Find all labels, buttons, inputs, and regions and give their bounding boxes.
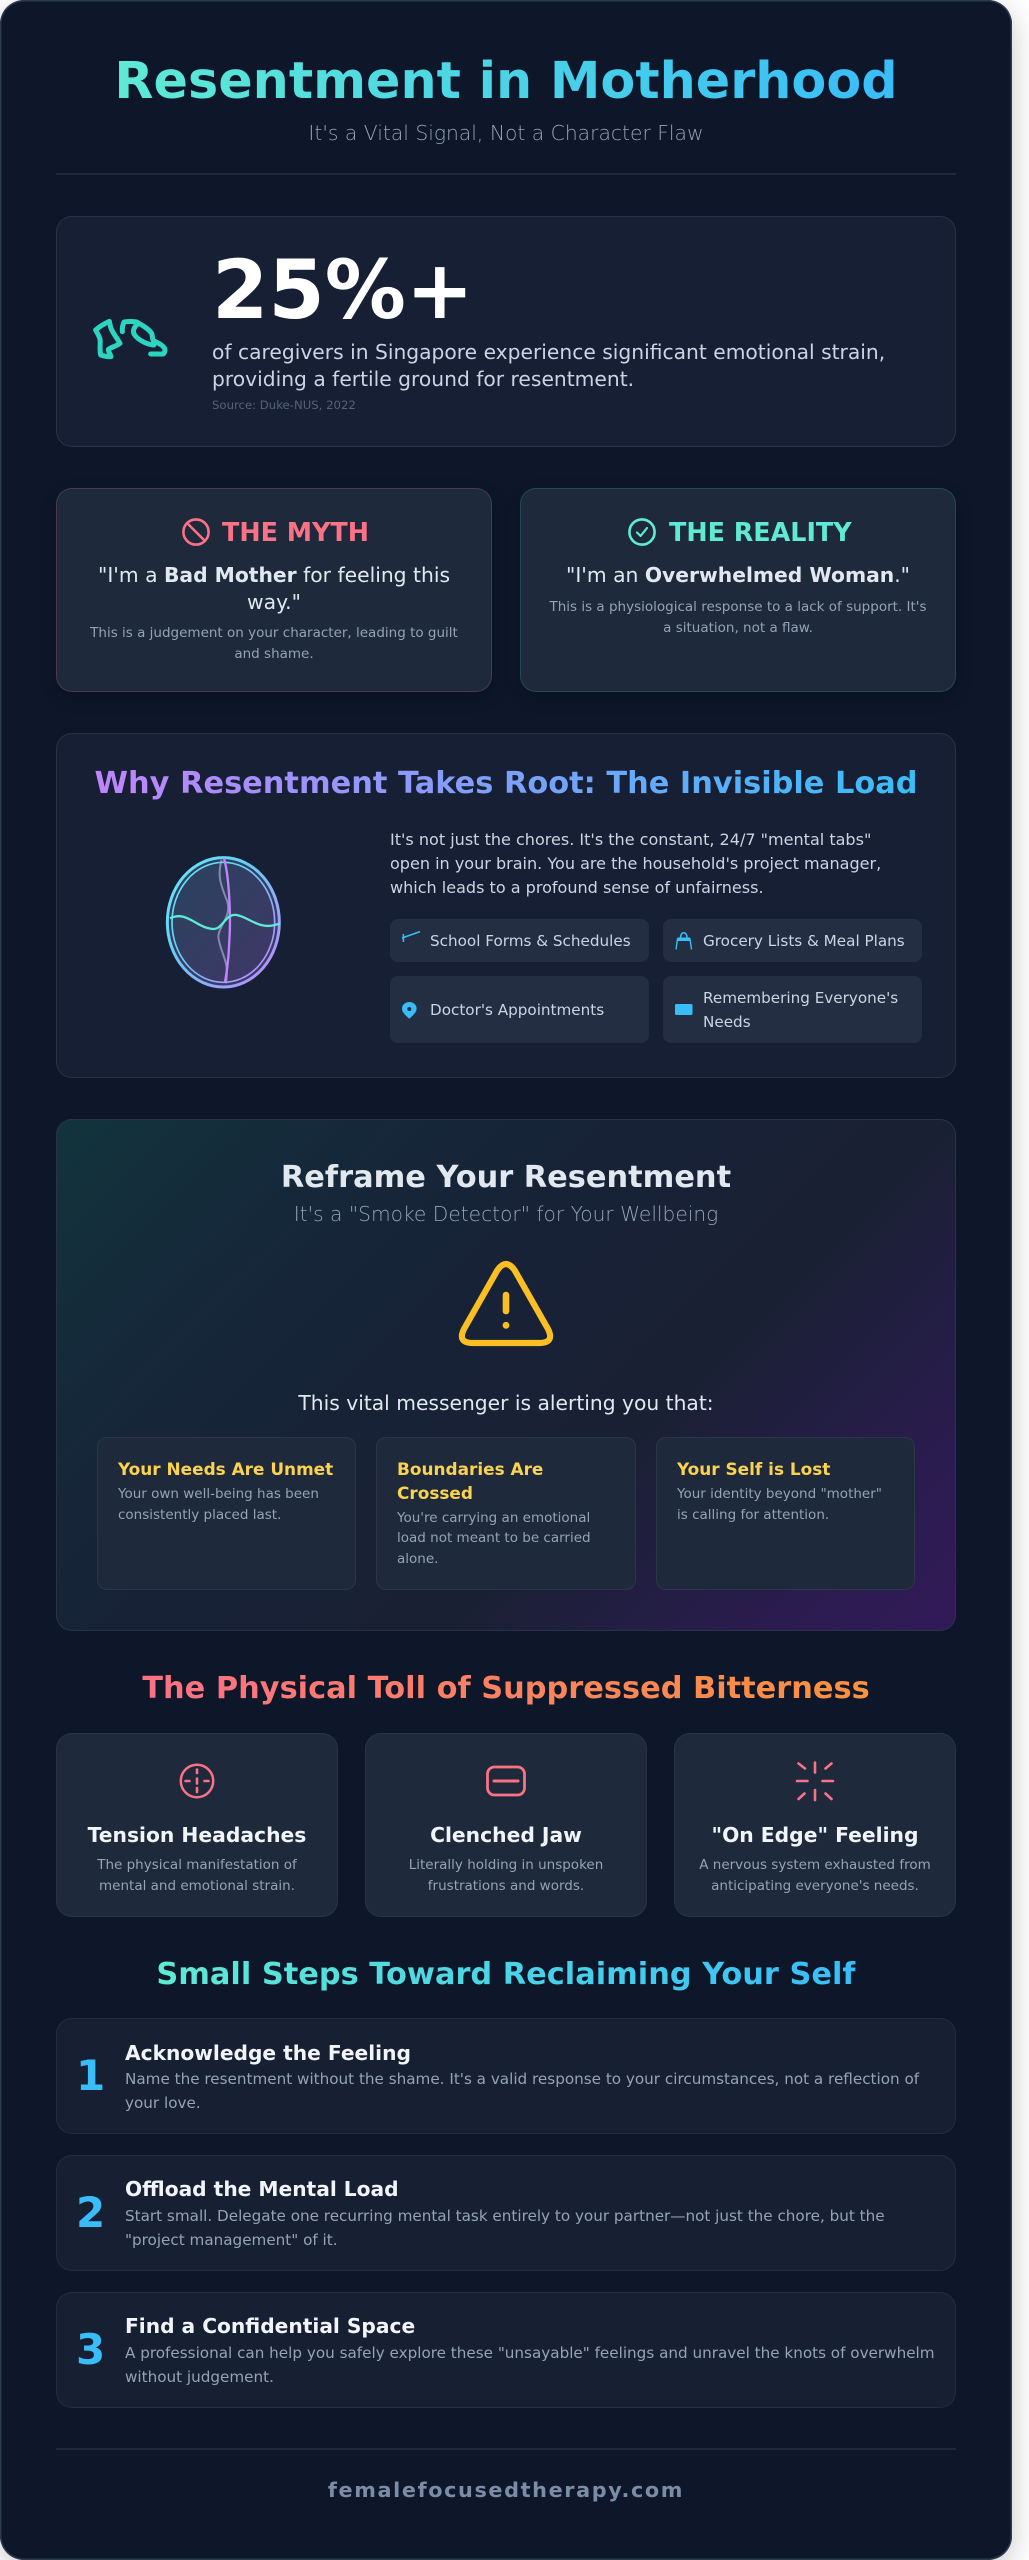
card text: load not meant to be carried [397,1530,591,1546]
card text [397,1510,591,1567]
step text [125,2206,885,2249]
myth quote: "I'm a Bad Mother for feeling this [98,563,450,587]
symptom text [699,1857,931,1894]
step number: 1 [76,2051,105,2100]
statistic description [212,340,885,390]
card heading: Your Needs Are Unmet [118,1459,333,1479]
step number: 3 [76,2325,105,2374]
card text: Your identity beyond "mother" [677,1486,882,1502]
panel: clenched jaw [365,1733,647,1917]
source: Source: Duke-NUS, 2022 [212,398,356,412]
panel: the reality [520,488,956,692]
step number: 2 [76,2188,105,2237]
icon: rectangle [675,1004,692,1015]
task label: Grocery Lists & Meal Plans [703,932,905,950]
card text: You're carrying an emotional [397,1510,590,1526]
step text: Start small. Delegate one recurring mental task entirely to your partner—not just the chore, but the [125,2206,885,2224]
card: needs unmet [97,1437,356,1590]
statistic description: providing a fertile ground for resentment. [212,366,634,390]
task label [703,989,898,1031]
card text [118,1486,319,1523]
step text: your love. [125,2094,201,2112]
card text: alone. [397,1551,438,1567]
reality heading: THE REALITY [669,517,852,547]
icon: shopping bag [675,932,692,950]
task label: Remembering Everyone's [703,989,898,1007]
panel: on edge [674,1733,956,1917]
panel: step 2 [56,2155,956,2271]
step text: without judgement. [125,2368,274,2386]
messenger line: This vital messenger is alerting you that: [298,1390,714,1414]
symptom text: The physical manifestation of [97,1857,297,1873]
card heading: Crossed [397,1483,473,1503]
panel: step 1 [56,2018,956,2134]
step title: Offload the Mental Load [125,2177,399,2201]
title: Resentment in Motherhood [114,51,898,110]
icon: jaw [486,1766,526,1796]
card: boundaries crossed [376,1437,636,1590]
invisible load heading: Why Resentment Takes Root: The Invisible Load [95,766,917,801]
card heading: Boundaries Are [397,1459,543,1479]
icon: map pin [402,1002,417,1019]
invisible load paragraph: open in your brain. You are the household's project manager, [390,854,881,872]
step text: "project management" of it. [125,2231,338,2249]
reality explanation: This is a physiological response to a lack of support. It's [549,599,927,615]
reframe heading: Reframe Your Resentment [281,1160,731,1195]
icon: hands [93,318,168,360]
icon: brain [166,856,281,988]
symptom text: Literally holding in unspoken [409,1857,603,1873]
symptom text: A nervous system exhausted from [699,1857,931,1873]
step text [125,2070,920,2112]
reality quote: "I'm an Overwhelmed Woman." [566,563,910,587]
symptom title: Tension Headaches [88,1823,306,1847]
icon: head target [180,1764,214,1798]
statistic description: of caregivers in Singapore experience significant emotional strain, [212,340,885,364]
card heading [397,1459,543,1503]
symptom text [97,1857,297,1894]
card: self lost [656,1437,915,1590]
reality explanation [549,599,927,636]
card text: consistently placed last. [118,1507,281,1523]
card heading: Your Self is Lost [677,1459,830,1479]
icon: nerves burst [796,1761,834,1802]
symptom title: Clenched Jaw [430,1823,582,1847]
reality explanation: a situation, not a flaw. [663,620,813,636]
big number: 25%+ [212,244,474,338]
invisible load paragraph [390,830,881,896]
subtitle: It's a Vital Signal, Not a Character Flaw [308,121,704,145]
physical toll heading: The Physical Toll of Suppressed Bitterness [142,1671,870,1706]
myth quote [98,563,450,614]
icon: warning triangle [458,1260,554,1346]
symptom text: mental and emotional strain. [99,1878,295,1894]
task label: School Forms & Schedules [430,932,631,950]
step text: Name the resentment without the shame. It's a valid response to your circumstances, not a reflection of [125,2070,919,2088]
myth explanation [90,625,458,662]
panel: reframe [56,1119,956,1631]
task: school forms [390,919,649,962]
panel: invisible load [56,733,956,1078]
symptom text [409,1857,603,1894]
step text [125,2344,935,2386]
small steps heading: Small Steps Toward Reclaiming Your Self [156,1957,856,1992]
panel: the myth [56,488,492,692]
card text [677,1486,882,1523]
myth explanation: and shame. [234,646,314,662]
icon: school form [402,930,420,942]
task label: Needs [703,1013,751,1031]
icon: check circle [628,518,656,546]
myth quote: way." [247,590,301,614]
invisible load paragraph: which leads to a profound sense of unfairness. [390,878,764,896]
step title: Acknowledge the Feeling [125,2040,411,2064]
invisible load paragraph: It's not just the chores. It's the constant, 24/7 "mental tabs" [390,830,871,848]
step title: Find a Confidential Space [125,2314,415,2338]
card text: Your own well-being has been [118,1486,319,1502]
panel: tension headaches [56,1733,338,1917]
symptom text: anticipating everyone's needs. [711,1878,919,1894]
panel: step 3 [56,2292,956,2408]
task label: Doctor's Appointments [430,1001,604,1019]
icon: prohibited [182,518,210,546]
task: grocery lists [663,919,922,962]
myth heading: THE MYTH [222,517,369,547]
symptom title: "On Edge" Feeling [712,1823,918,1847]
card text: is calling for attention. [677,1507,829,1523]
panel: statistic [56,216,956,447]
task: remembering needs [663,976,922,1043]
step text: A professional can help you safely explore these "unsayable" feelings and unravel the knots of overwhelm [125,2344,935,2362]
myth explanation: This is a judgement on your character, leading to guilt [90,625,458,641]
symptom text: frustrations and words. [428,1878,584,1894]
reframe subtitle: It's a "Smoke Detector" for Your Wellbeing [294,1202,718,1226]
task: doctor appointments [390,976,649,1043]
footer website: femalefocusedtherapy.com [328,2478,684,2502]
